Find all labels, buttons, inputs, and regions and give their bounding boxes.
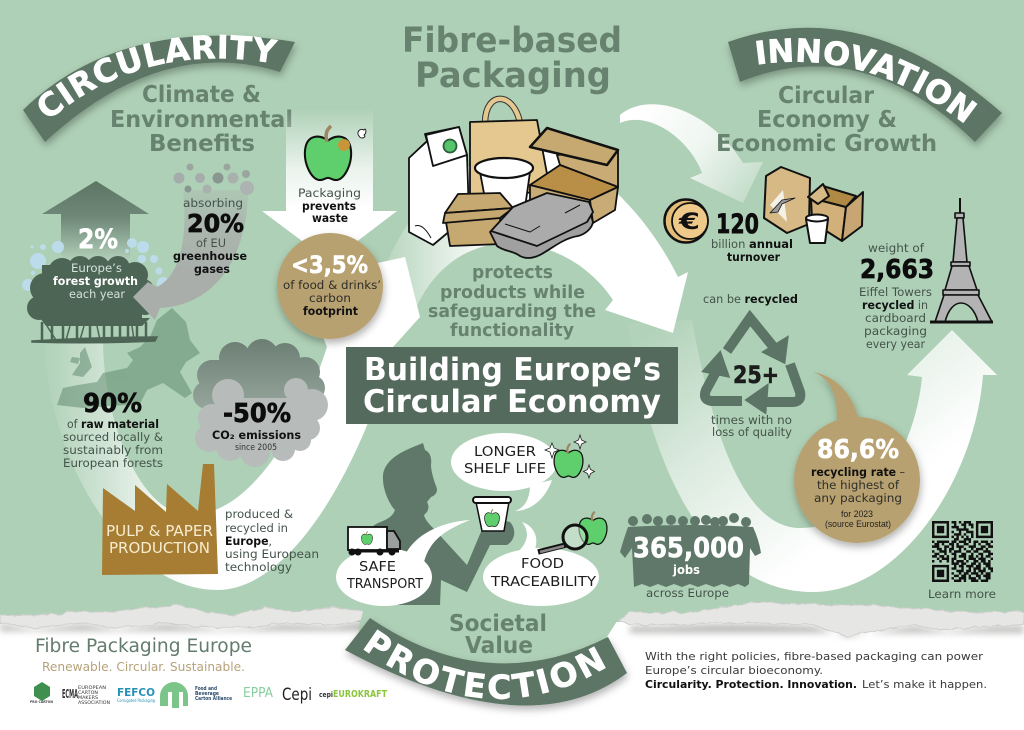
logo: Food and Beverage Carton Alliance: Food and	[195, 686, 217, 692]
icon: Europe map	[57, 308, 200, 408]
callout: 86,6% recycling rate: for 2023	[841, 509, 873, 520]
text: forest growth: 2%	[78, 224, 118, 255]
text: 2,663 Eiffel Towers: every year	[866, 337, 925, 351]
heading: Climate and Environmental Benefits: Environmental	[110, 107, 293, 133]
icon: coin: €	[678, 210, 700, 235]
text: closing statement: With the right policies, fibre-based packaging can power	[645, 650, 984, 663]
text: packaging prevents waste: waste	[312, 211, 348, 225]
icon: cement bag, box and cup	[764, 167, 863, 243]
text: 2,663 Eiffel Towers: 2,663	[860, 255, 934, 285]
arrow: right loop band	[628, 320, 997, 592]
logo: EPPA: EPPA	[243, 686, 273, 701]
brand: Fibre Packaging Europe: Renewable. Circular. Sustainable.	[42, 659, 245, 674]
text: produced and recycled in Europe: technology	[225, 560, 292, 574]
text: protects products: products while	[440, 283, 585, 303]
callout: 86,6% recycling rate: 86,6%	[817, 435, 899, 465]
text: can be recycled: can be recycled	[703, 292, 798, 306]
text: 90% raw material: sourced locally &	[63, 430, 163, 444]
callout: longer shelf life: LONGER	[474, 445, 536, 460]
text: packaging prevents waste	[298, 186, 361, 225]
text: -50% CO2	[212, 399, 301, 453]
logo: Cepi Eurokraft: cepi	[319, 691, 333, 699]
arrow: prevents waste	[262, 108, 397, 262]
banner: INNOVATION: INNOVATION	[756, 38, 978, 124]
text: -50% CO2: CO₂ emissions	[212, 428, 301, 442]
text: protects products	[428, 263, 596, 341]
panel: Building Europe's Circular Economy: Building Europe’s	[364, 352, 661, 388]
text: closing statement: Let’s make it happen.	[862, 678, 987, 691]
text: closing statement: Europe’s circular bioeconomy.	[645, 664, 823, 677]
text: 2,663 Eiffel Towers: cardboard	[865, 311, 926, 325]
callout: 86,6% recycling rate	[794, 372, 920, 543]
icon: QR code	[928, 522, 996, 601]
brand: Fibre Packaging Europe: Fibre Packaging Europe	[35, 636, 252, 657]
banner: INNOVATION	[726, 28, 1004, 148]
text: absorbing 20%: gases	[194, 262, 230, 276]
icon: recycling symbol	[704, 318, 800, 412]
icon: Eiffel Tower	[930, 198, 993, 322]
text: absorbing 20%: of EU	[196, 236, 226, 250]
icon: factory: PRODUCTION	[109, 539, 210, 557]
text: 90% raw material	[63, 389, 163, 470]
text: 365,000 jobs: 365,000	[633, 531, 744, 564]
text: 365,000 jobs	[633, 531, 744, 600]
logo: ECMA: ASSOCIATION	[78, 700, 110, 706]
text: produced and recycled in Europe: using European	[225, 547, 319, 561]
icon: greenhouse gas arrow	[133, 164, 254, 320]
text: forest growth: each year	[69, 287, 125, 301]
icon: factory	[102, 464, 218, 575]
icon: apple with spot	[305, 126, 366, 180]
icon: trees	[27, 256, 157, 343]
text: 120 billion: billion annual	[711, 237, 793, 251]
brand: Fibre Packaging Europe	[35, 636, 252, 674]
heading: Circular Economy and Economic Growth: Economic Growth	[716, 131, 937, 157]
text: 2,663 Eiffel Towers: recycled in	[862, 298, 928, 312]
icon: light cloud	[195, 378, 328, 467]
heading: Climate and Environmental Benefits	[110, 82, 293, 157]
icon: forest growth arrow	[42, 181, 149, 275]
icon: kraft box	[443, 193, 513, 246]
text: protects products: protects	[472, 263, 553, 283]
panel: Building Europe's Circular Economy	[346, 347, 678, 424]
logo: FEFCO	[117, 686, 155, 704]
heading: Societal Value: Value	[465, 633, 533, 659]
text: produced and recycled in Europe: recycled in	[225, 521, 288, 535]
icon: apple with sparkles	[545, 435, 594, 478]
heading: Climate and Environmental Benefits: Climate &	[142, 82, 261, 108]
text: absorbing 20%: 20%	[187, 209, 244, 238]
text: -50% CO2: -50%	[223, 399, 291, 429]
banner: CIRCULARITY: CIRCULARITY	[38, 34, 278, 116]
icon: truck	[348, 527, 400, 555]
icon: QR code: Learn more	[928, 587, 996, 601]
text: 120 billion: turnover	[727, 250, 780, 264]
logo: FEFCO: Corrugated Packaging	[117, 698, 155, 704]
icon: dark cloud	[193, 339, 325, 410]
text: -50% CO2: since 2005	[235, 443, 277, 453]
callout: longer shelf life: SHELF LIFE	[464, 462, 546, 477]
text: 90% raw material: 90%	[83, 389, 142, 419]
logos row	[30, 682, 387, 708]
torn paper footer	[0, 603, 1024, 730]
icon: fibre packaging group	[409, 99, 618, 258]
text: forest growth: Europe’s	[71, 261, 122, 275]
icon: person silhouette	[350, 443, 514, 605]
panel: Building Europe's Circular Economy: Circular Economy	[363, 384, 661, 420]
text: absorbing 20%: absorbing	[183, 196, 243, 210]
heading: Climate and Environmental Benefits: Benefits	[149, 131, 255, 157]
icon: magnifier and apple	[538, 512, 607, 552]
title: Fibre-based Packaging: Fibre-based	[402, 21, 622, 61]
icon: yoghurt cup	[473, 497, 511, 531]
callout: 3,5% carbon footprint: carbon	[309, 291, 351, 305]
arrow: small curved arrow to innovation	[620, 104, 763, 203]
text: 2,663 Eiffel Towers: weight of	[868, 241, 925, 255]
icon: blue bubbles	[22, 238, 169, 291]
heading: Societal Value	[449, 611, 547, 659]
icon: milk carton	[409, 127, 469, 245]
text: produced and recycled in Europe: Europe,	[225, 534, 272, 548]
logo: Cepi Eurokraft	[319, 689, 387, 700]
logo: Food and Beverage Carton Alliance: Carton Alliance	[195, 696, 233, 702]
title: Fibre-based Packaging	[402, 21, 622, 96]
text: 2,663 Eiffel Towers: packaging	[864, 324, 927, 338]
icon: factory: PULP & PAPER	[106, 522, 213, 540]
title: Fibre-based Packaging: Packaging	[415, 56, 611, 96]
callout: safe transport: SAFE	[359, 560, 396, 575]
text: 25+ times with no loss of quality: times with no	[711, 413, 792, 427]
logo: Cepi: Cepi	[282, 685, 312, 705]
text: closing statement: Circularity. Protection. Innovation.	[645, 678, 857, 691]
protection dome background	[358, 600, 622, 675]
text: produced and recycled in Europe	[225, 507, 319, 574]
callout: food traceability: FOOD	[521, 557, 564, 572]
callout: 86,6% recycling rate: recycling rate –	[811, 465, 905, 479]
logo: ECMA: EUROPEAN	[78, 685, 106, 691]
callout: 3,5% carbon footprint: <3,5%	[291, 251, 368, 279]
text: 25+ times with no loss of quality	[711, 361, 792, 439]
text: packaging prevents waste: prevents	[302, 199, 356, 213]
heading: Circular Economy and Economic Growth	[716, 83, 937, 157]
logo: Food and Beverage Carton Alliance: Beverage	[195, 691, 220, 697]
text: produced and recycled in Europe: produced &	[225, 507, 293, 521]
callout: 86,6% recycling rate: (source Eurostat)	[825, 519, 891, 530]
text: protects products: safeguarding the	[428, 302, 596, 322]
text: 90% raw material: European forests	[63, 456, 163, 470]
text: 120 billion: 120	[716, 209, 759, 240]
logo: Pro Carton: PRO CARTON	[30, 700, 53, 704]
heading: Circular Economy and Economic Growth: Economy &	[757, 107, 897, 133]
text: closing statement	[645, 650, 987, 691]
callout: 3,5% carbon footprint: footprint	[303, 304, 358, 318]
text: protects products: functionality	[450, 321, 575, 341]
logo: Pro Carton	[30, 682, 53, 704]
text: 365,000 jobs: jobs	[672, 563, 700, 577]
icon: people group	[620, 513, 761, 587]
icon: paper bag	[470, 99, 550, 200]
callout: food traceability: TRACEABILITY	[490, 575, 596, 590]
logo: Food and Beverage Carton Alliance	[160, 682, 233, 708]
logo: ECMA: CARTON	[78, 690, 98, 696]
text: 2,663 Eiffel Towers: Eiffel Towers	[859, 285, 932, 299]
logo: ECMA: ECMA	[62, 687, 78, 701]
banner: PROTECTION: PROTECTION	[364, 629, 606, 700]
callout: safe transport: TRANSPORT	[346, 577, 423, 592]
callout: 86,6% recycling rate: any packaging	[814, 491, 902, 505]
icon: open takeaway box	[530, 128, 618, 223]
text: absorbing 20%	[173, 196, 247, 276]
callout: 3,5% carbon footprint	[277, 233, 383, 339]
logo: FEFCO: FEFCO	[117, 686, 155, 699]
flow arrows	[43, 104, 997, 592]
text: 25+ times with no loss of quality: 25+	[733, 361, 779, 389]
text: 90% raw material: of raw material	[67, 417, 159, 431]
text: absorbing 20%: greenhouse	[173, 249, 247, 263]
text: 25+ times with no loss of quality: loss of quality	[712, 425, 792, 439]
text: 120 billion	[711, 209, 793, 264]
logo: ECMA: MAKERS	[78, 695, 98, 701]
text: packaging prevents waste: Packaging	[298, 186, 361, 200]
icon: coin	[664, 200, 708, 242]
text: 90% raw material: sustainably from	[63, 443, 163, 457]
arrow: top dome band	[375, 150, 688, 333]
text: 2,663 Eiffel Towers	[859, 241, 934, 351]
icon: grey moulded tray	[490, 193, 593, 258]
logo: Cepi Eurokraft: EUROKRAFT	[333, 689, 387, 700]
callout: longer shelf life	[451, 433, 557, 511]
text: forest growth	[53, 224, 138, 301]
text: forest growth: forest growth	[53, 274, 138, 288]
heading: Circular Economy and Economic Growth: Circular	[778, 83, 875, 109]
icon: white cup	[475, 158, 533, 215]
callout: food traceability	[483, 522, 599, 606]
text: 365,000 jobs: across Europe	[646, 586, 729, 600]
arrow: left loop band	[43, 257, 420, 590]
callout: 3,5% carbon footprint: of food & drinks’	[283, 278, 381, 292]
callout: safe transport	[336, 520, 470, 606]
logo: ECMA	[62, 685, 110, 706]
heading: Societal Value: Societal	[449, 611, 547, 637]
callout: 86,6% recycling rate: the highest of	[817, 478, 900, 492]
